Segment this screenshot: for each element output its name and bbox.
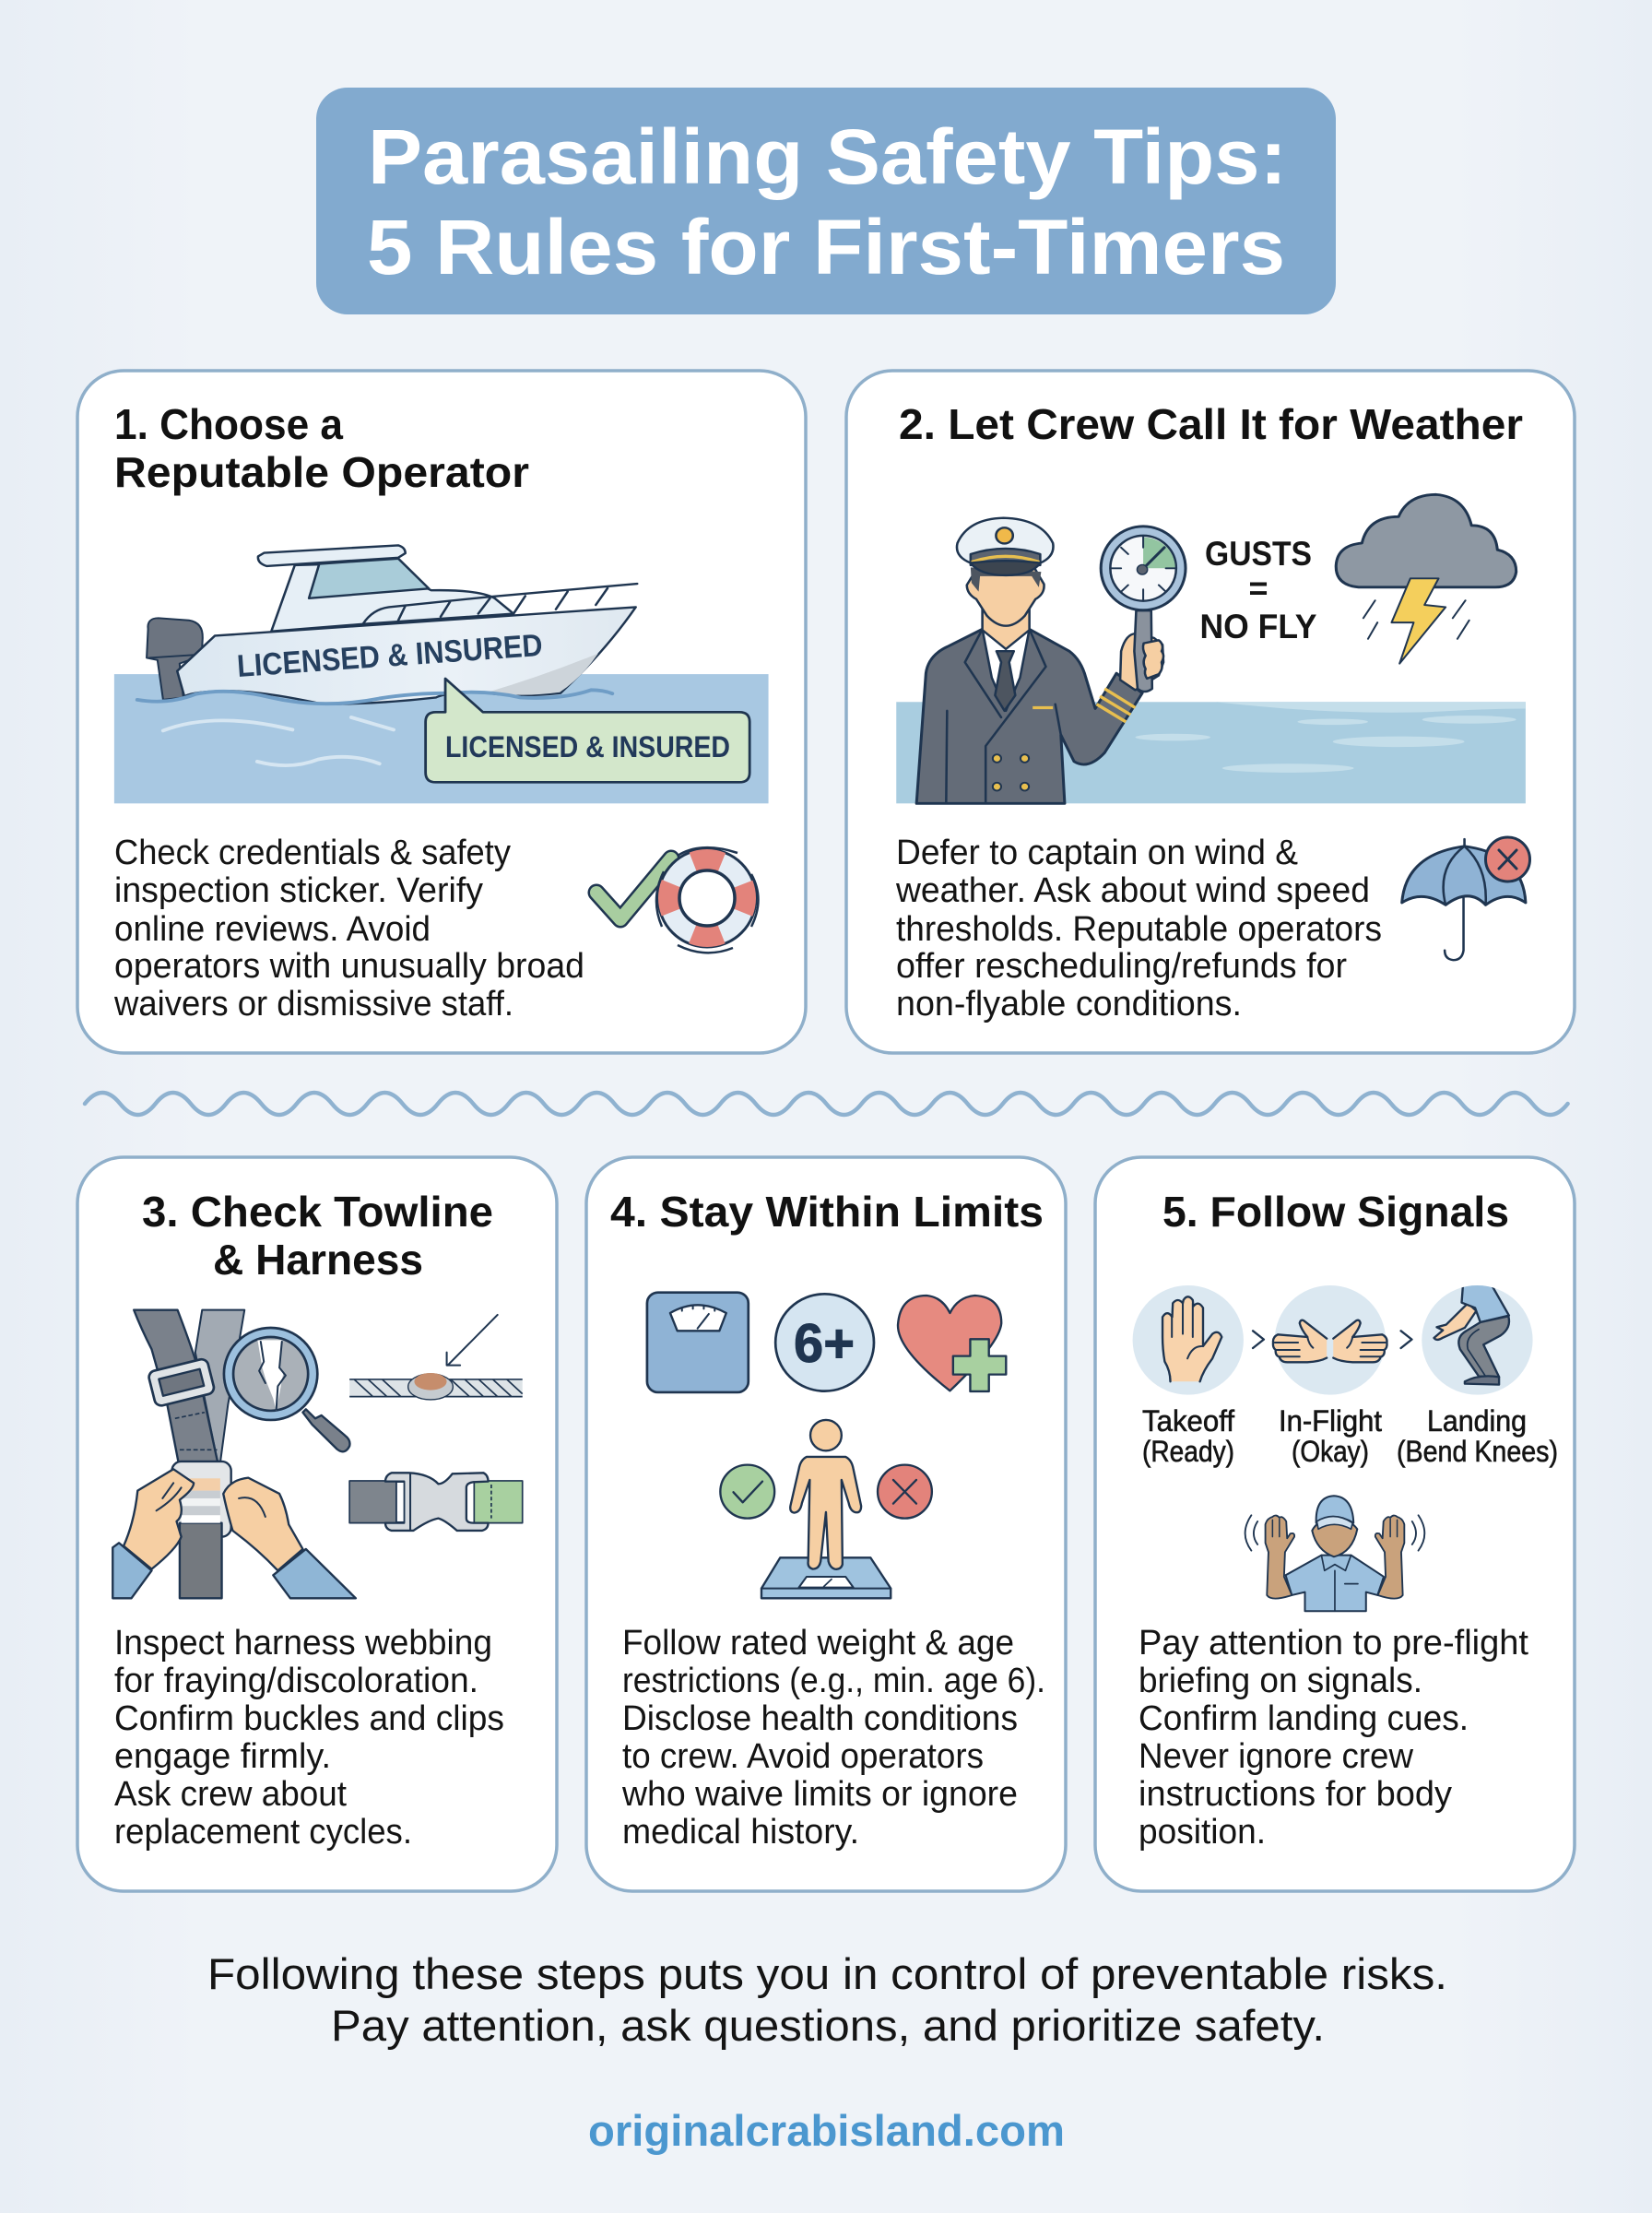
panel: 4 stay within limits: [586, 1157, 1066, 1891]
body text: rule 4: restrictions (e.g., min. age 6).: [622, 1662, 1045, 1700]
body text: rule 3: engage firmly.: [114, 1737, 331, 1776]
body text: rule 3: Inspect harness webbing: [114, 1624, 492, 1663]
body text: rule 2: non-flyable conditions.: [896, 985, 1242, 1024]
body text: rule 4: to crew. Avoid operators: [622, 1737, 984, 1776]
wave divider: [85, 1093, 1568, 1115]
heading: rule 2: 2. Let Crew Call It for Weather: [899, 400, 1523, 448]
body text: rule 3: replacement cycles.: [114, 1813, 412, 1852]
illustration: harness inspection: [112, 1310, 523, 1598]
title banner: Parasailing Safety Tips:: [368, 113, 1287, 200]
illustration: captain with wind gauge: [896, 494, 1526, 803]
signal labels: In-Flight: [1279, 1404, 1382, 1438]
illustration: crew member signalling: [1245, 1496, 1424, 1611]
body text: rule 1: operators with unusually broad: [114, 947, 584, 986]
heading: rule 1: 1. Choose a: [114, 400, 343, 448]
heading: rule 3: & Harness: [213, 1236, 423, 1284]
illustration: captain with wind gauge: =: [1248, 569, 1268, 607]
title banner: 5 Rules for First-Timers: [367, 204, 1285, 290]
illustration: person on scale with check and cross: [720, 1420, 932, 1598]
heading: rule 1: [114, 400, 529, 496]
closing statement: [207, 1949, 1447, 2050]
body text: rule 3: Ask crew about: [114, 1775, 347, 1814]
heading: rule 3: [142, 1188, 493, 1284]
illustration: boat on water with licensed callout: LICENSED & INSURED: [445, 730, 730, 763]
body text: rule 1: Check credentials & safety: [114, 834, 511, 872]
closing statement: Following these steps puts you in control of preventable risks.: [207, 1949, 1447, 1998]
body text: rule 3: [114, 1624, 504, 1852]
panel: 1 choose a reputable operator: [77, 371, 806, 1053]
signal labels: (Ready): [1142, 1435, 1234, 1468]
body text: rule 2: thresholds. Reputable operators: [896, 910, 1382, 949]
icon row: scale, age badge, heart: 6+: [794, 1313, 855, 1374]
signal labels: (Bend Knees): [1397, 1435, 1558, 1468]
body text: rule 5: position.: [1139, 1813, 1266, 1852]
body text: rule 5: Never ignore crew: [1139, 1737, 1414, 1776]
panel: 3 check towline and harness: [77, 1157, 557, 1891]
body text: rule 1: online reviews. Avoid: [114, 910, 431, 949]
body text: rule 4: Follow rated weight & age: [622, 1624, 1014, 1663]
illustration: captain with wind gauge: NO FLY: [1200, 608, 1317, 645]
body text: rule 5: instructions for body: [1139, 1775, 1452, 1814]
body text: rule 2: Defer to captain on wind &: [896, 834, 1298, 872]
panel: 5 follow signals: [1095, 1157, 1575, 1891]
body text: rule 1: [113, 834, 584, 1024]
signal labels: [1142, 1404, 1558, 1468]
body text: rule 4: who waive limits or ignore: [621, 1775, 1018, 1814]
body text: rule 5: [1139, 1624, 1528, 1852]
body text: rule 4: Disclose health conditions: [622, 1699, 1018, 1738]
panel: 2 let crew call it for weather: [846, 371, 1575, 1053]
heading: rule 1: Reputable Operator: [114, 448, 529, 496]
icon row: hand signals: [1133, 1282, 1533, 1395]
body text: rule 3: for fraying/discoloration.: [114, 1662, 478, 1700]
heading: rule 3: 3. Check Towline: [142, 1188, 493, 1236]
body text: rule 5: Pay attention to pre-flight: [1139, 1624, 1528, 1663]
body text: rule 2: offer rescheduling/refunds for: [896, 947, 1347, 986]
body text: rule 5: briefing on signals.: [1139, 1662, 1422, 1700]
signal labels: Landing: [1427, 1404, 1527, 1438]
body text: rule 3: Confirm buckles and clips: [114, 1699, 504, 1738]
illustration: boat on water with licensed callout: [114, 545, 769, 803]
body text: rule 2: [895, 834, 1382, 1024]
heading: rule 4: 4. Stay Within Limits: [610, 1188, 1044, 1236]
signal labels: Takeoff: [1142, 1404, 1234, 1438]
icon: umbrella with cross: [1402, 837, 1530, 960]
illustration: captain with wind gauge: GUSTS: [1205, 535, 1312, 573]
illustration: boat on water with licensed callout: LICENSED & INSURED: [236, 628, 544, 684]
body text: rule 2: weather. Ask about wind speed: [895, 871, 1370, 910]
closing statement: Pay attention, ask questions, and prioritize safety.: [331, 2001, 1325, 2050]
body text: rule 1: inspection sticker. Verify: [114, 871, 483, 910]
icon: check mark and life ring: [596, 847, 758, 953]
body text: rule 5: Confirm landing cues.: [1139, 1699, 1469, 1738]
icon row: scale, age badge, heart: [647, 1293, 1006, 1392]
heading: rule 5: 5. Follow Signals: [1162, 1188, 1509, 1236]
body text: rule 1: waivers or dismissive staff.: [113, 985, 513, 1024]
title banner: [316, 88, 1336, 314]
signal labels: (Okay): [1292, 1435, 1369, 1468]
body text: rule 4: [621, 1624, 1045, 1852]
body text: rule 4: medical history.: [622, 1813, 859, 1852]
website url: originalcrabisland.com: [588, 2106, 1065, 2155]
